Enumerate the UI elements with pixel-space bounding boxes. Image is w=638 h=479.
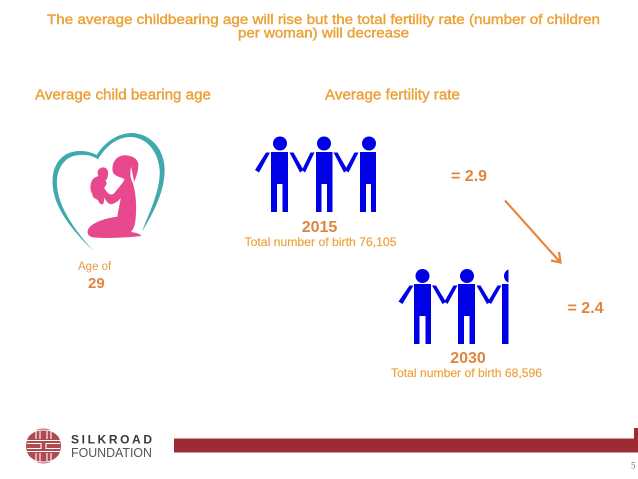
label: age of 29: Age of [78, 261, 112, 273]
label: 2030 total births: Total number of birth 68,596 [391, 366, 542, 380]
logo: silkroad emblem [26, 428, 61, 464]
heading: average fertility rate: Average fertility rate [325, 86, 460, 104]
label: age of 29 [78, 261, 112, 292]
label: 2015 total births [244, 219, 397, 249]
icon: mother and baby in heart [53, 133, 165, 251]
label: 2030 total births: 2030 [450, 350, 486, 367]
arrow: decrease [505, 200, 560, 262]
footer bar [174, 428, 638, 452]
label: age of 29: 29 [88, 275, 105, 292]
logo: silkroad foundation wordmark: FOUNDATION [71, 446, 152, 460]
value: 2.9: = 2.9 [451, 168, 487, 185]
title: The average childbearing age will rise but the total fertility rate (number of children [47, 12, 600, 28]
label: 2015 total births: 2015 [302, 219, 337, 236]
pictogram: three figures 2030 [398, 269, 520, 344]
page number: 5 [631, 460, 636, 470]
value: 2.4: = 2.4 [568, 300, 604, 317]
heart outline [53, 133, 165, 251]
logo: silkroad foundation wordmark [71, 432, 152, 460]
label: 2030 total births [391, 350, 542, 380]
heading: average child bearing age: Average child bearing age [35, 86, 211, 104]
pictogram: three figures 2015 [255, 136, 376, 212]
title [47, 12, 600, 42]
label: 2015 total births: Total number of birth 76,105 [244, 235, 397, 249]
logo: silkroad foundation wordmark: SILKROAD [71, 432, 152, 446]
mother silhouette [88, 155, 141, 238]
baby silhouette [90, 167, 108, 204]
title: per woman) will decrease [238, 26, 409, 42]
